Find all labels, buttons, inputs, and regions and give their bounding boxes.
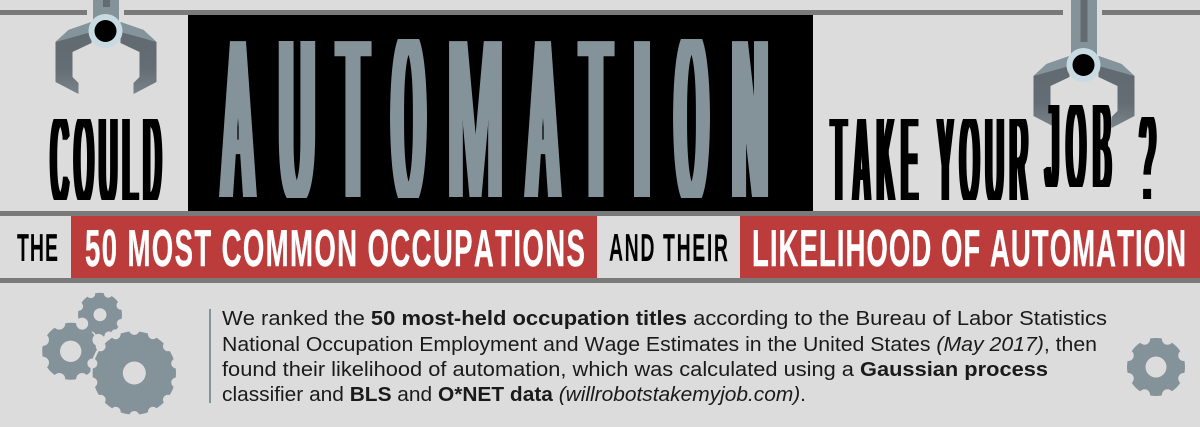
divider: paragraph rule	[209, 309, 211, 403]
title: AUTOMATION	[219, 39, 768, 198]
banner text: and their: AND THEIR	[609, 226, 730, 270]
icon: small gear	[77, 292, 123, 338]
heading: question mark: ?	[1139, 83, 1156, 234]
heading: COULD: COULD	[50, 86, 167, 235]
icon: large gear	[90, 329, 178, 417]
text block: intro paragraph	[222, 308, 1107, 406]
icon: right robotic claw	[1034, 0, 1134, 128]
text block: intro paragraph: found their likelihood of automation, which was calculated using a Gaussian process	[222, 359, 1048, 381]
icon: medium gear	[41, 321, 101, 381]
banner text: THE: THE	[17, 226, 59, 270]
text block: intro paragraph: classifier and BLS and O*NET data (willrobotstakemyjob.com) .	[222, 384, 806, 406]
panel: black title background	[188, 15, 813, 211]
text block: intro paragraph: National Occupation Employment and Wage Estimates in the United States (May 2017) , then	[222, 334, 1097, 356]
banner text: likelihood of automation: LIKELIHOOD OF AUTOMATION	[752, 219, 1187, 277]
heading: TAKE YOUR: TAKE YOUR	[831, 86, 1034, 235]
banner: red segment one	[71, 216, 597, 278]
text block: intro paragraph: We ranked the 50 most-held occupation titles according to the Bureau of Labor Statistics	[222, 308, 1107, 330]
icon: right gear	[1126, 337, 1186, 397]
heading: JOB: JOB	[1045, 73, 1118, 222]
icon: large gear cluster	[41, 292, 178, 417]
icon: left robotic claw	[56, 0, 156, 94]
banner: red segment two	[740, 216, 1200, 278]
banner text: 50 most common occupations: 50 MOST COMMON OCCUPATIONS	[85, 219, 586, 277]
